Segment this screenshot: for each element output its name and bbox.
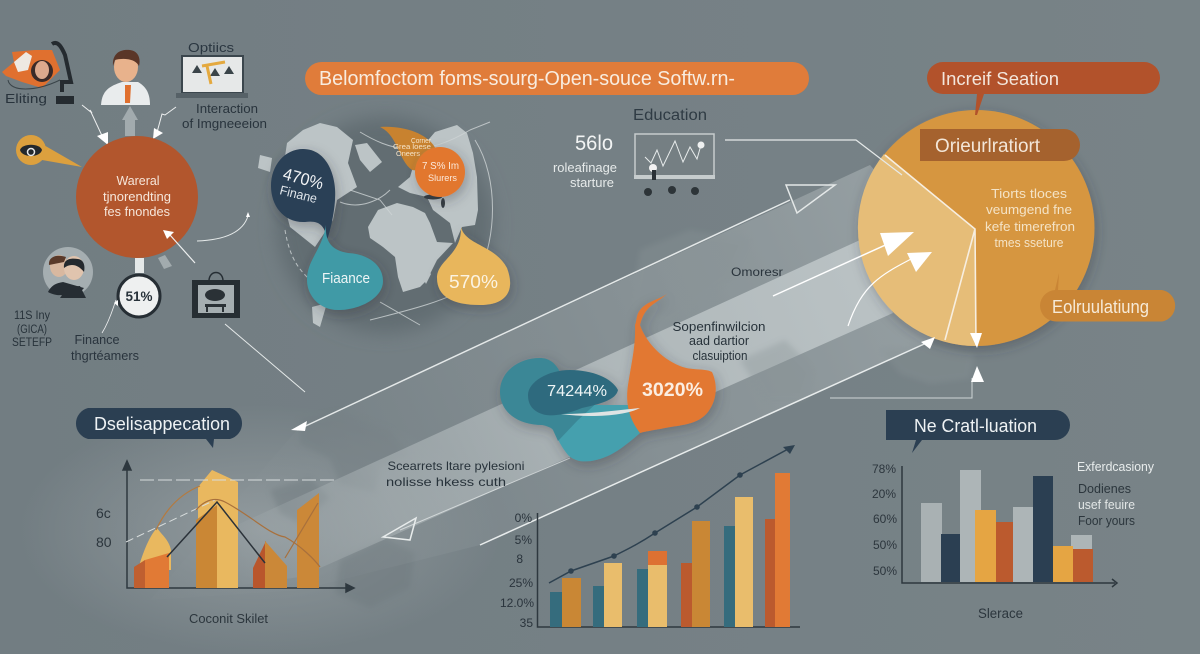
label box [920,129,1080,161]
bars [550,473,790,627]
text: left stats: 11S Iny [14,310,50,322]
central shape [500,293,716,461]
centre text: clasuiption [692,349,748,363]
icon: bag [192,272,240,318]
y axis labels: 8 [516,552,523,566]
panel: pie section [725,62,1175,398]
panel: left network [2,40,305,392]
map bubble: 470% finance: 470% [281,165,325,193]
arrow: up to circle [122,106,138,136]
axis labels: 6c [96,505,111,521]
y axis labels: 78% [872,462,896,476]
trend lines [126,480,335,567]
map bubble: amber note [380,127,437,170]
pie text: Tiorts tloces [991,187,1067,201]
y axis labels: 50% [873,538,897,552]
text: left stats: SETEFP [12,337,52,349]
icon: eye with tail [16,135,82,167]
chart caption: Slerace [978,606,1023,621]
connector: circle to 51% [135,258,144,273]
pill: dselisappecation [76,408,242,448]
pie text [985,187,1075,250]
arrow: lower diagonal [383,340,933,545]
pill: ne cratl-luation [886,410,1070,453]
panel: middle bar chart [500,445,800,630]
text: left stats [12,310,52,349]
lower-left map texture [20,405,500,654]
globe disc [277,117,493,333]
trend line [549,445,795,583]
main circle [76,136,198,258]
y axis labels: 5% [515,533,532,547]
left text: nolisse hkess cuth [386,475,506,489]
title [305,62,809,95]
main circle: fes fnondes [104,204,170,219]
arrow to circle from lower right [158,230,195,269]
central shape: 74244% [547,383,607,400]
y axis labels: 20% [872,487,896,501]
education caption: starture [570,175,614,190]
pie chart [858,110,1094,346]
world map [258,123,478,327]
label: optiics: Optiics [188,40,235,55]
text: finance: thgrtéamers [71,349,139,363]
chart legend text: Dodienes [1078,482,1131,496]
text: interaction [182,102,267,131]
arrow to 51% [102,300,118,333]
panel: left bar chart [76,408,354,626]
text: left stats: (GICA) [17,324,47,336]
education caption [553,160,617,190]
map bubble: 570% [437,227,510,305]
map bubble: orange stat [415,147,465,197]
panel: right bar chart [872,410,1155,621]
chart axes [902,466,1117,587]
chart axes [123,461,354,592]
central shape: 3020% [642,379,703,401]
education heading: Education [633,107,707,124]
icon: businessman [101,50,150,105]
arrow: upper diagonal [291,185,835,431]
icon: two people [43,247,93,298]
map bubble: finance [307,225,383,310]
axis labels: 80 [96,534,112,550]
pie text: tmes sseture [994,236,1064,250]
map bubble: amber note: Oneers [396,151,421,158]
centre text [672,320,766,363]
callout pill [1040,273,1175,322]
centre text: Sopenfinwilcion [672,320,766,334]
icon: monitor line chart [634,134,715,196]
icon: woman with lamp [2,43,74,104]
title: Belomfoctom foms-sourg-Open-souce Softw.rn- [319,67,735,90]
map bubble: 570%: 570% [449,271,498,292]
chart legend text: usef feuire [1078,498,1135,512]
map dark seas [424,194,445,208]
map bubble: 470% finance: Finane [278,182,319,206]
text: finance [71,333,139,363]
y axis labels: 25% [509,576,533,590]
y axis labels: 50% [873,564,897,578]
panel: world globe [258,117,510,333]
stat circle: 51%: 51% [126,289,152,304]
arrows into pie [773,232,984,398]
label box: Orieurlratiort [935,136,1041,157]
pill: ne cratl-luation: Ne Cratl-luation [914,416,1037,436]
y axis labels: 12.0% [500,596,534,610]
chart legend text [1077,460,1155,528]
education stat: 56lo [575,132,613,155]
globe connector arrow [197,212,250,241]
pie pointer line [725,140,902,175]
axis labels [96,505,112,550]
chart legend text: Foor yours [1078,514,1135,528]
panel: centre [386,265,783,489]
main circle: tjnorendting [103,189,171,204]
text: finance: Finance [74,333,120,347]
globe route lines [285,122,492,325]
text: interaction: of Imgneeeion [182,117,267,131]
left text [386,459,524,489]
y axis labels: 35 [520,616,533,630]
chart axes [538,513,800,627]
panel: education [553,107,715,196]
text: interaction: Interaction [196,102,258,116]
stat circle: 51% [118,275,160,317]
icon: laptop [176,56,248,98]
map bubble: amber note: Corner [411,138,432,145]
bars [921,470,1093,582]
label: omeresr: Omoresr [731,265,783,279]
y axis labels: 60% [873,512,897,526]
chart legend text: Exferdcasiony [1077,460,1155,474]
pie text: kefe timerefron [985,220,1075,234]
diagonal bands [130,165,990,600]
y axis labels [872,462,897,578]
arrows into circle [82,105,176,145]
pill: dselisappecation: Dselisappecation [94,414,230,434]
callout pill: Eolruulatiung [1052,296,1149,317]
icon label: Eliting [5,91,47,106]
left text: Scearrets ltare pylesioni [388,459,524,473]
education caption: roleafinage [553,160,617,175]
map bubble: orange stat: 7 S% Im [422,161,459,172]
main circle: Wareral [116,173,160,188]
map bubble: orange stat: Slurers [428,173,458,183]
map bubble: finance: Fiaance [322,271,370,287]
bars [134,470,319,588]
map bubble: amber note: Grea loese [393,144,431,151]
pie text: veumgend fne [986,203,1072,217]
heading pill [927,62,1160,115]
y axis labels: 0% [515,511,532,525]
map bubble: 470% finance [271,149,335,240]
heading pill: Increif Seation [941,68,1059,89]
line from bag toward band [225,324,305,392]
y axis labels [500,511,534,630]
chart caption: Coconit Skilet [189,611,268,626]
centre text: aad dartior [689,334,749,348]
